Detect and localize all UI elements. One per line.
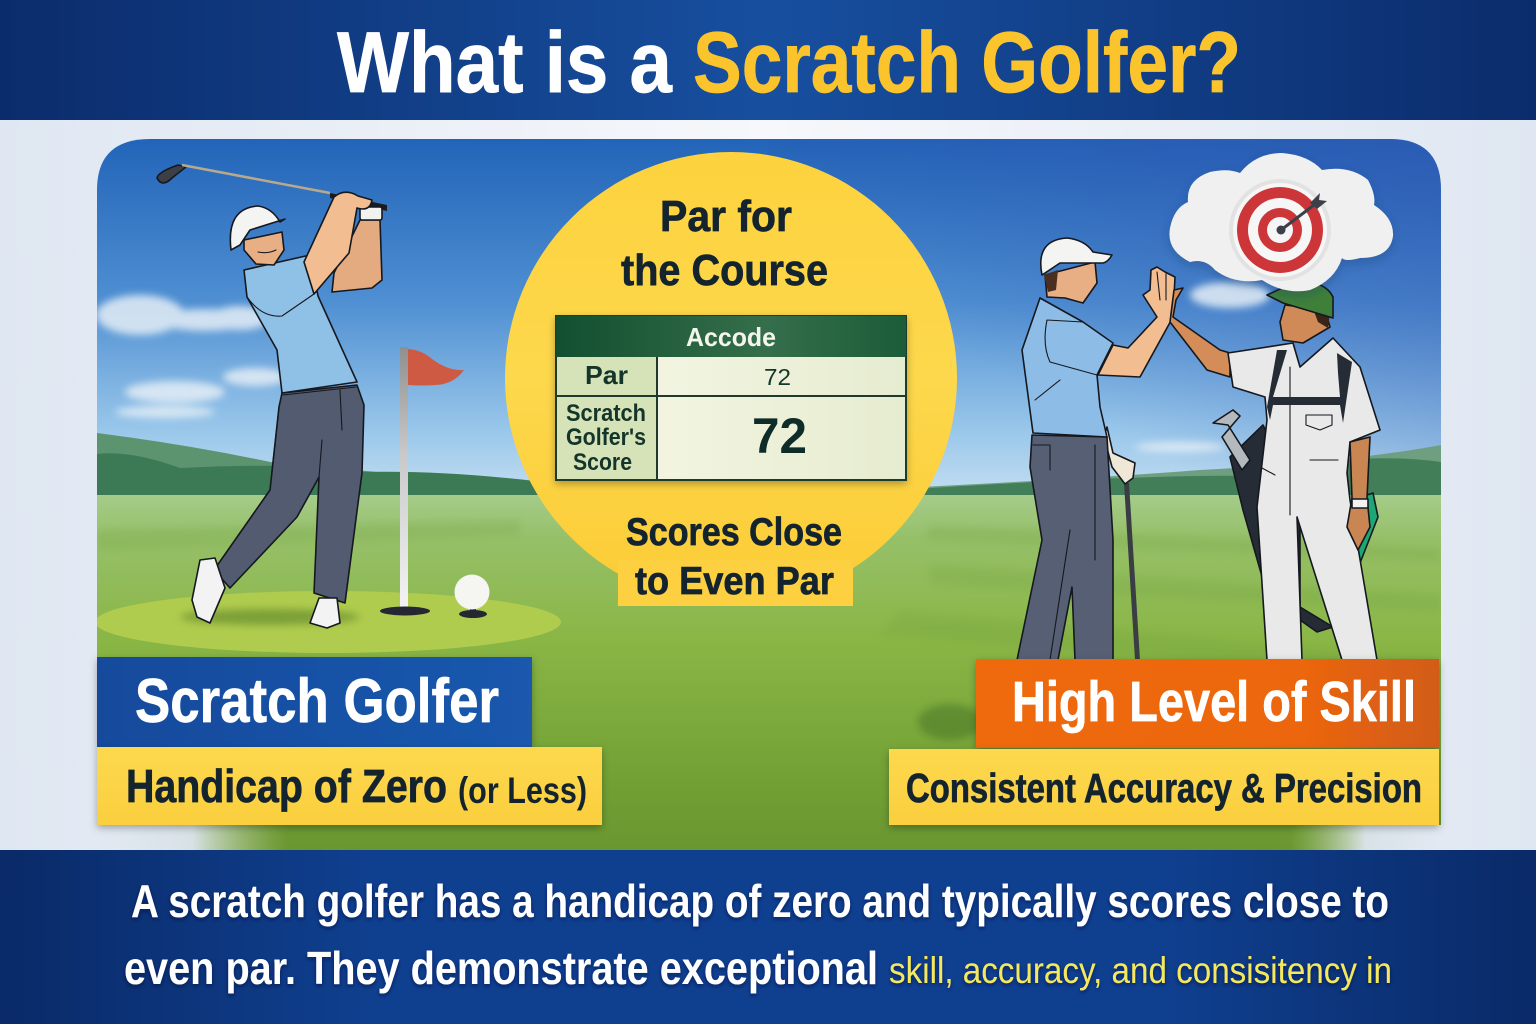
bottom left fade: [97, 825, 287, 850]
heading: par for the course: Par for: [660, 192, 792, 241]
towel: [1359, 492, 1379, 562]
page background: [0, 120, 1536, 855]
coverall: [1228, 338, 1380, 660]
scorecard table: Par: [585, 360, 628, 390]
summary text: [124, 875, 1392, 994]
label: scratch golfer: [97, 657, 532, 747]
label: handicap of zero: (or Less): [458, 770, 587, 811]
golfer two: [1017, 238, 1175, 660]
title: What is a: [337, 15, 673, 111]
putting green: [95, 591, 561, 653]
icon: target: [1229, 179, 1331, 281]
shoes: [192, 558, 225, 623]
cap: [1267, 282, 1333, 318]
title: [337, 15, 1241, 111]
shadow near skill label: [918, 704, 982, 740]
front arm: [304, 192, 372, 294]
shirt: [1022, 298, 1113, 437]
scorecard table: Score: [573, 449, 632, 476]
text: scores close to even par: Scores Close: [626, 511, 842, 554]
label: consistent accuracy and precision: Consistent Accuracy & Precision: [906, 765, 1422, 811]
clouds: [96, 282, 1270, 452]
panel: golf course scene: [95, 139, 1441, 855]
caddie raised arm: [1170, 288, 1230, 377]
scorecard table: 72: [764, 364, 791, 390]
label: scratch golfer: Scratch Golfer: [135, 667, 499, 736]
forearm: [1347, 437, 1370, 550]
back arm and glove: [1104, 427, 1135, 484]
summary text: skill, accuracy, and consisitency in: [889, 950, 1392, 991]
label: high level of skill: [976, 659, 1439, 748]
cap: [1041, 238, 1112, 275]
scorecard table: Scratch: [566, 400, 646, 427]
thought cloud with target: [1169, 153, 1393, 291]
tree line: [97, 433, 1441, 498]
golf ball: [454, 574, 490, 618]
flag: [380, 347, 464, 616]
scorecard table: Golfer's: [566, 424, 646, 451]
label: handicap of zero: [97, 747, 602, 825]
trousers: [1017, 435, 1113, 660]
scorecard table: Accode: [686, 322, 776, 352]
title: Scratch Golfer?: [693, 15, 1241, 111]
label: high level of skill: High Level of Skill: [1012, 670, 1416, 734]
label: consistent accuracy and precision: [889, 749, 1439, 825]
fairway stripes: [102, 522, 1234, 546]
caddie: [1170, 282, 1380, 660]
ground shadow: [180, 609, 360, 625]
title banner: [0, 0, 1536, 120]
glove: [360, 207, 382, 220]
golf bag: [1213, 410, 1333, 632]
summary text: even par. They demonstrate exceptional: [124, 942, 878, 994]
bottom right fade: [1290, 825, 1441, 850]
back arm: [332, 220, 382, 292]
harness straps: [1267, 350, 1352, 423]
arm and hand: [1098, 267, 1175, 377]
cap: [230, 206, 285, 250]
label: handicap of zero: Handicap of Zero: [126, 760, 447, 812]
head: [244, 232, 284, 265]
heading: par for the course: the Course: [621, 246, 828, 295]
shirt: [244, 255, 357, 393]
golf club: [157, 165, 387, 211]
text: scores close to even par: to Even Par: [635, 560, 834, 603]
heading: par for the course: [621, 192, 828, 295]
trousers: [214, 385, 364, 603]
text: scores close to even par: [626, 511, 842, 603]
golfer: [157, 165, 387, 628]
head: [1280, 305, 1330, 343]
footer banner: [0, 850, 1536, 1024]
putter: [1124, 483, 1140, 660]
watch: [1352, 499, 1368, 508]
scorecard table: 72: [752, 408, 807, 464]
head: [1044, 262, 1097, 303]
scorecard table: [556, 316, 906, 480]
panel: par for the course circle: [505, 152, 957, 606]
